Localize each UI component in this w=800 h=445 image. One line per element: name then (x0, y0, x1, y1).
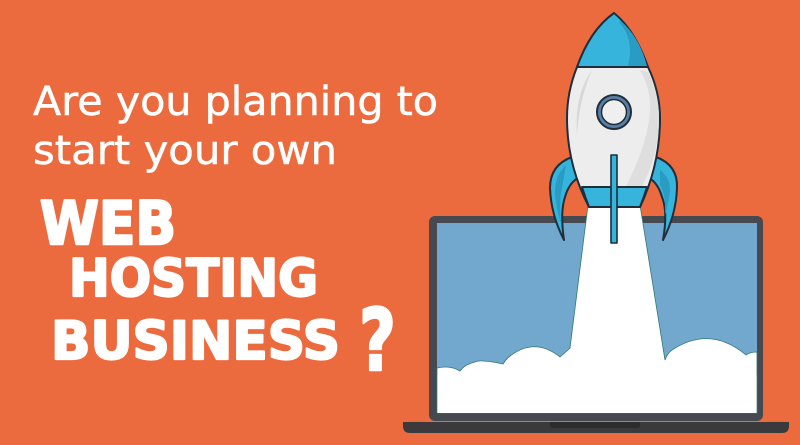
body highlight (577, 70, 592, 135)
heading: intro question (33, 79, 438, 174)
rocket body (567, 67, 660, 207)
center rod (611, 155, 617, 243)
heading: web hosting business (40, 189, 396, 391)
rocket exhaust and clouds (437, 205, 757, 413)
laptop (403, 216, 789, 433)
heading: intro question: start your own (33, 128, 337, 174)
nose shading (619, 21, 647, 66)
heading: web hosting business: BUSINESS (51, 311, 340, 372)
nose cone (577, 13, 648, 67)
laptop base (403, 422, 789, 433)
laptop screen (437, 223, 757, 413)
heading: web hosting business: ? (359, 291, 396, 391)
laptop lid (429, 216, 763, 421)
rocket (550, 13, 677, 243)
heading: web hosting business: WEB (40, 189, 176, 259)
heading: web hosting business: HOSTING (69, 249, 318, 309)
body shading (626, 70, 659, 186)
clean lower edge of clouds (437, 375, 757, 413)
heading: intro question: Are you planning to (33, 79, 438, 125)
porthole window (597, 95, 631, 129)
right fin (649, 157, 677, 240)
rocket band (582, 187, 647, 207)
left fin (550, 157, 578, 240)
laptop notch (550, 422, 640, 428)
